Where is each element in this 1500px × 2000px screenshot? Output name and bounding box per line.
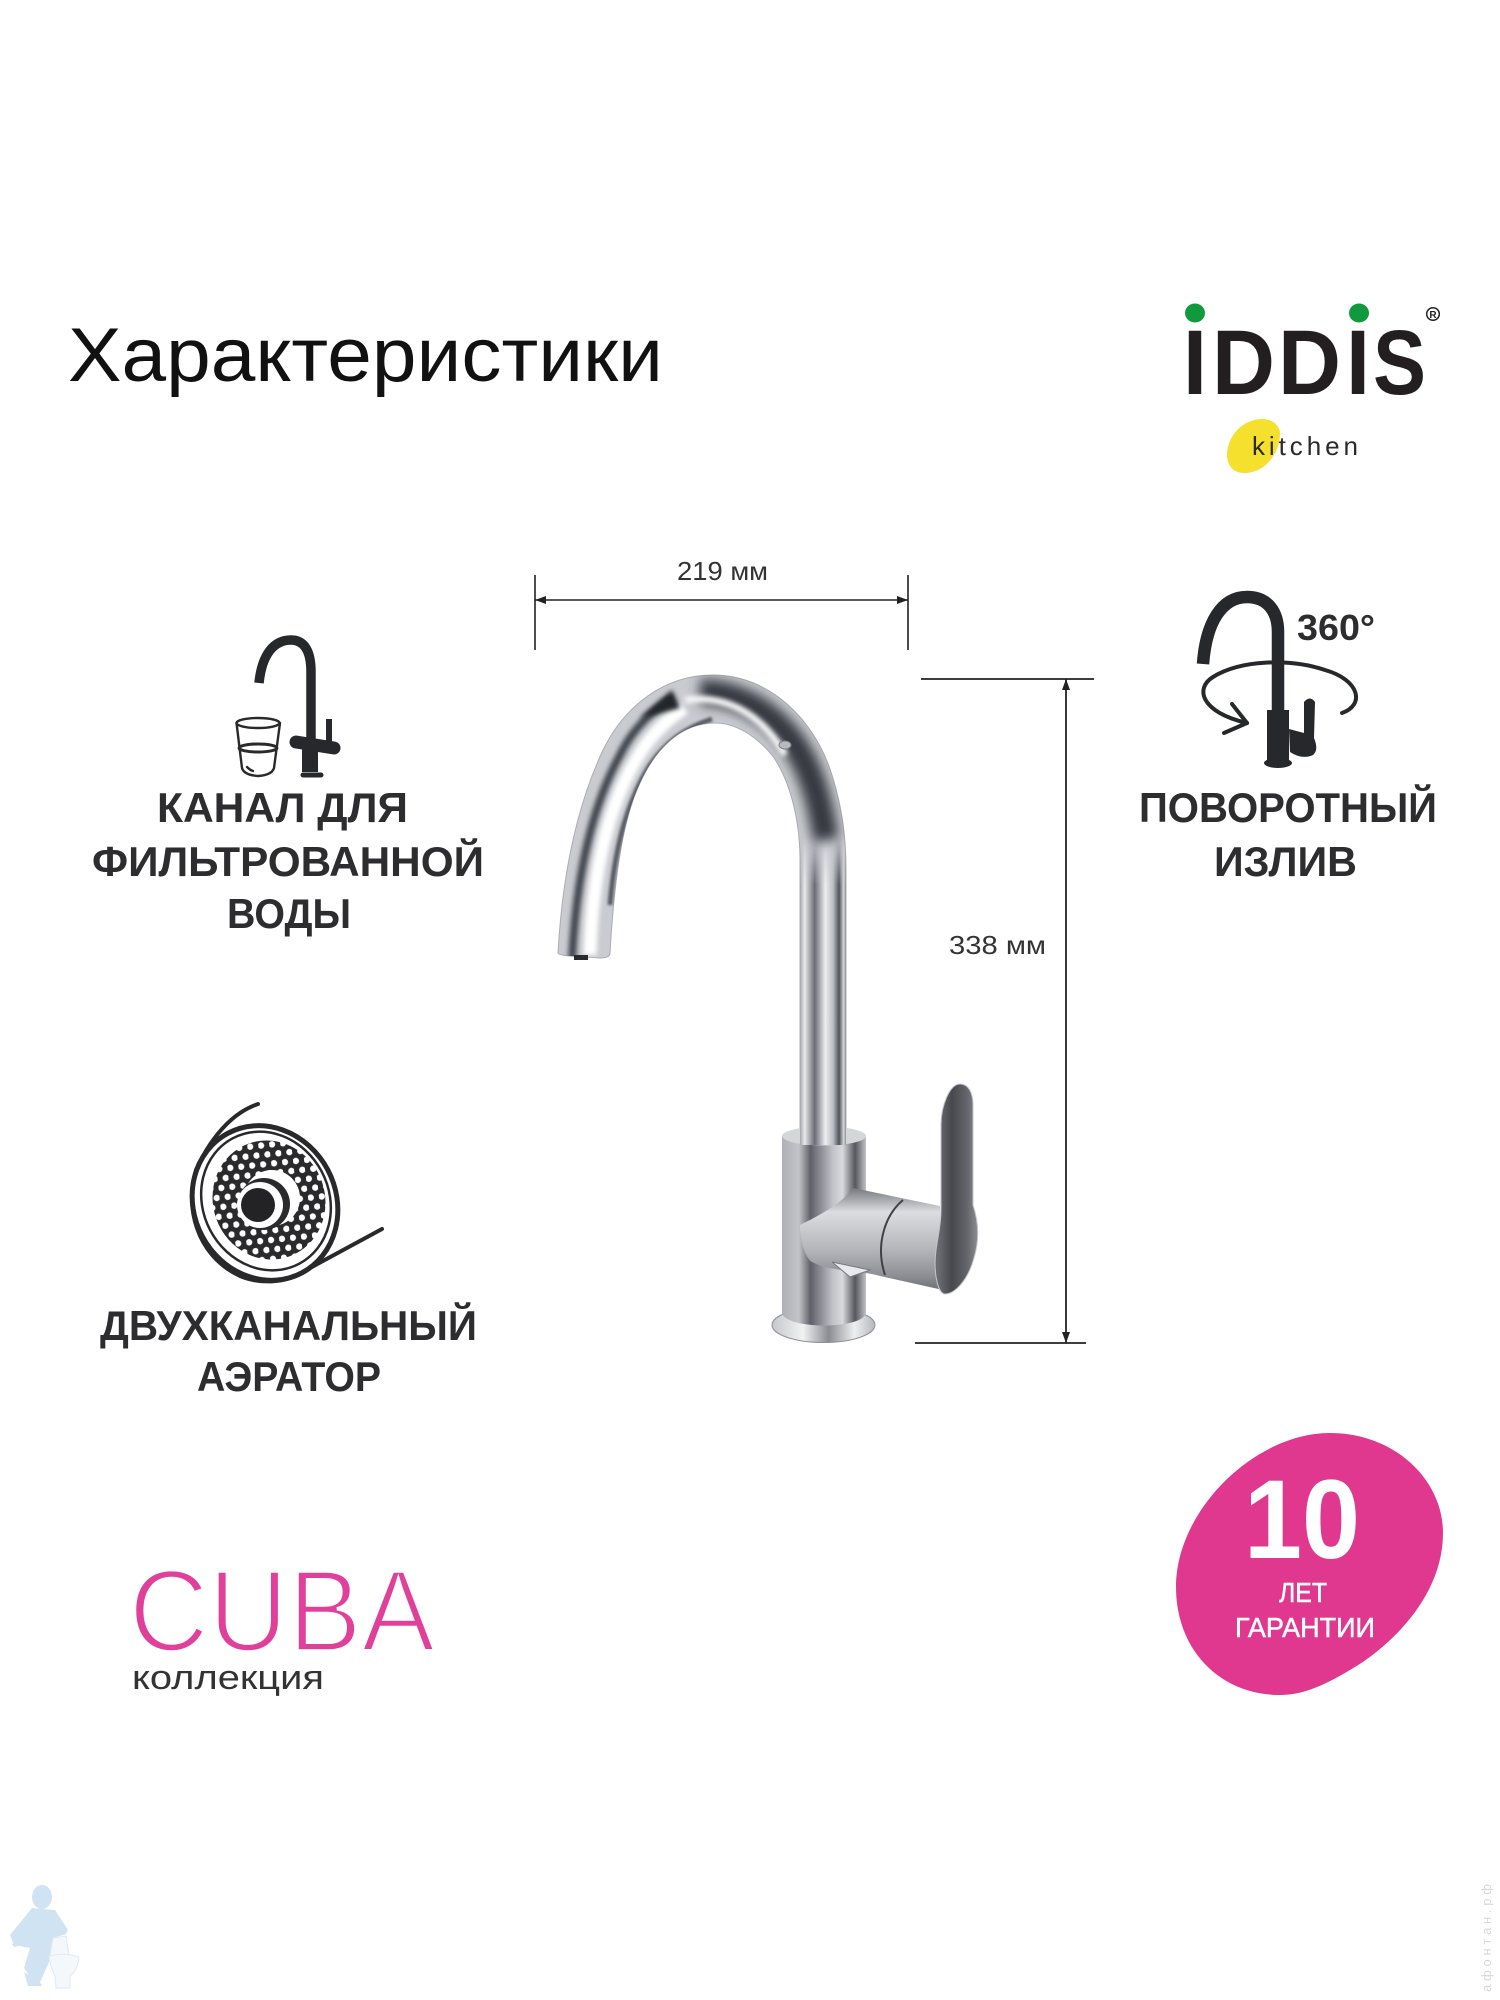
logo wordmark: S bbox=[1373, 312, 1426, 414]
glass bbox=[236, 718, 280, 776]
faucet flange bbox=[772, 1308, 875, 1342]
icon: swivel spout 360 bbox=[1203, 597, 1375, 768]
icon: filter faucet with glass bbox=[236, 640, 334, 776]
logo wordmark: D bbox=[1212, 312, 1275, 414]
faucet arm seam bbox=[881, 1200, 903, 1275]
faucet arm slot bbox=[832, 1262, 870, 1277]
watermark: plumber bbox=[10, 1885, 79, 1988]
dimension: height 338 mm: 338 мм bbox=[949, 930, 1046, 960]
faucet spout bbox=[558, 675, 846, 1145]
dimension: width 219 mm: 219 мм bbox=[677, 556, 768, 586]
feature text: filtered water channel bbox=[92, 784, 484, 937]
badge blob bbox=[1176, 1433, 1443, 1695]
feature text: filtered water channel: КАНАЛ ДЛЯ bbox=[157, 784, 408, 831]
badge caption bbox=[1235, 1577, 1375, 1643]
faucet silhouette bbox=[259, 640, 334, 775]
warranty badge bbox=[1176, 1433, 1443, 1695]
aerator spiral rings bbox=[165, 1100, 382, 1306]
rotation arrow bbox=[1203, 662, 1356, 733]
logo wordmark bbox=[1183, 312, 1426, 414]
faucet product bbox=[558, 675, 978, 1342]
feature text: filtered water channel: ВОДЫ bbox=[227, 890, 351, 937]
registered mark: R bbox=[1429, 310, 1437, 321]
logo kitchen text: kitchen bbox=[1252, 431, 1358, 461]
aerator mesh disc bbox=[196, 1124, 342, 1276]
faucet handle arm bbox=[800, 1188, 943, 1290]
logo yellow blob bbox=[1227, 419, 1280, 473]
feature text: swivel spout bbox=[1139, 783, 1437, 885]
registered mark bbox=[1427, 308, 1439, 321]
feature text: dual channel aerator bbox=[100, 1301, 477, 1400]
badge caption: ГАРАНТИИ bbox=[1235, 1612, 1375, 1643]
faucet lever bbox=[935, 1084, 978, 1294]
icon: aerator bbox=[165, 1100, 382, 1306]
feature text: dual channel aerator: АЭРАТОР bbox=[197, 1353, 381, 1400]
logo wordmark: D bbox=[1278, 312, 1341, 414]
feature text: swivel spout: ПОВОРОТНЫЙ bbox=[1139, 783, 1437, 831]
CUBA wordmark: CUBA bbox=[129, 1546, 436, 1676]
feature text: dual channel aerator: ДВУХКАНАЛЬНЫЙ bbox=[100, 1301, 477, 1349]
title: Характеристики bbox=[68, 313, 663, 398]
aerator hub bbox=[237, 1170, 300, 1230]
swivel faucet silhouette bbox=[1203, 597, 1316, 768]
badge caption: ЛЕТ bbox=[1279, 1577, 1327, 1608]
logo: IDDIS kitchen bbox=[1183, 304, 1439, 473]
feature text: filtered water channel: ФИЛЬТРОВАННОЙ bbox=[92, 837, 484, 885]
360 label: 360° bbox=[1297, 607, 1375, 648]
logo wordmark: I bbox=[1346, 312, 1370, 414]
logo green dots bbox=[1185, 304, 1369, 322]
watermark: site name: афонтан.рф bbox=[1479, 1884, 1494, 1992]
badge number: 10 bbox=[1244, 1457, 1360, 1582]
dimension: width 219 mm bbox=[535, 556, 908, 650]
feature text: swivel spout: ИЗЛИВ bbox=[1214, 838, 1357, 885]
faucet pipe collar bbox=[800, 1125, 846, 1145]
collection name: CUBA bbox=[129, 1546, 436, 1697]
faucet body top bbox=[782, 1126, 866, 1146]
logo wordmark: I bbox=[1183, 312, 1207, 414]
faucet body bbox=[782, 1136, 866, 1326]
collection caption: коллекция bbox=[132, 1659, 324, 1697]
dimension: height 338 mm bbox=[915, 679, 1094, 1343]
